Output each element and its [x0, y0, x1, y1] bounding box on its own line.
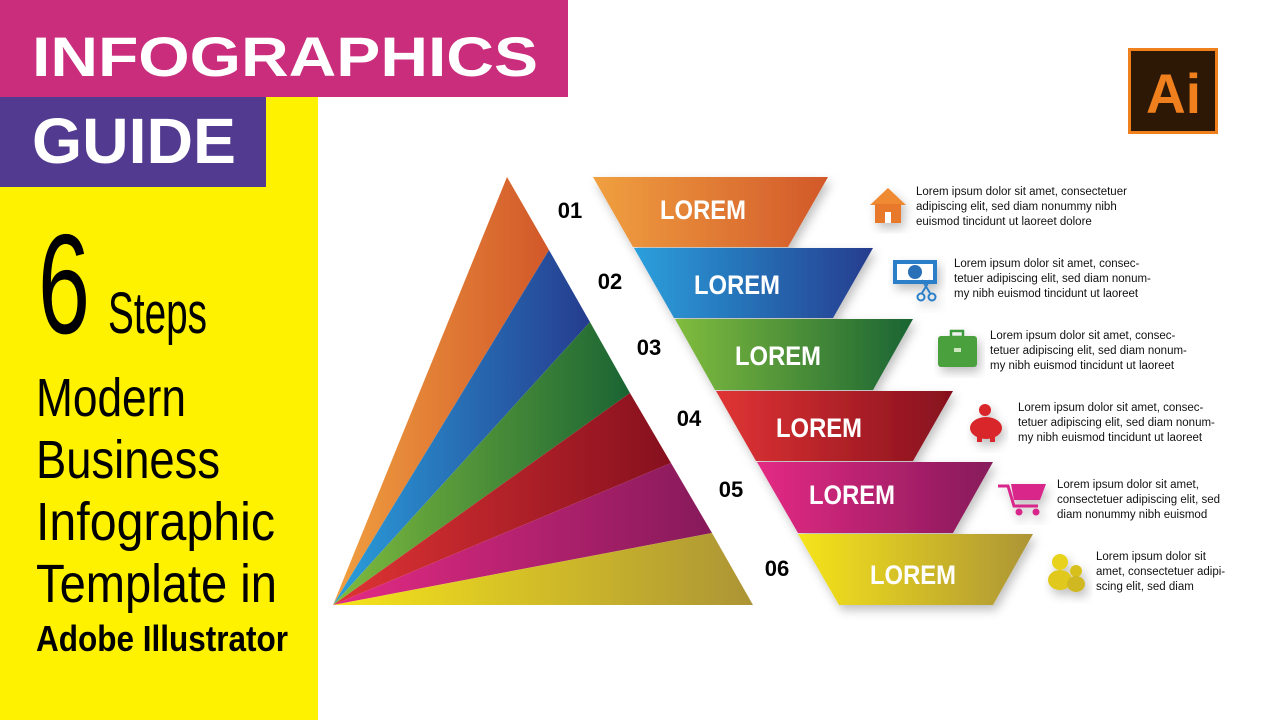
step labels: LOREM: [735, 341, 821, 371]
text: step 4: Lorem ipsum dolor sit amet, consec-: [1018, 402, 1204, 414]
text: step 2: tetuer adipiscing elit, sed diam nonum-: [954, 273, 1151, 285]
icon: house: [870, 188, 906, 223]
subtitle: description: Infographic: [36, 492, 275, 552]
pyramid fan: [333, 177, 753, 605]
step numbers: [558, 198, 789, 581]
subtitle: description: Business: [36, 430, 220, 490]
text: step 3: tetuer adipiscing elit, sed diam nonum-: [990, 345, 1187, 357]
text: step 2: Lorem ipsum dolor sit amet, consec-: [954, 258, 1140, 270]
icon: adobe illustrator logo: Ai: [1146, 62, 1201, 125]
text: step 5: consectetuer adipiscing elit, sed: [1057, 494, 1220, 506]
text: step 3: my nibh euismod tincidunt ut laoreet: [990, 360, 1175, 372]
step numbers: 01: [558, 198, 582, 223]
text: step 6: scing elit, sed diam: [1096, 581, 1194, 593]
step labels: LOREM: [776, 413, 862, 443]
step labels: LOREM: [660, 195, 746, 225]
step labels: LOREM: [870, 560, 956, 590]
text: step 6: Lorem ipsum dolor sit: [1096, 551, 1207, 563]
subtitle: description: Template in: [36, 554, 277, 614]
text: step 4: [1018, 402, 1215, 444]
text: step 5: diam nonummy nibh euismod: [1057, 509, 1207, 521]
text: step 4: tetuer adipiscing elit, sed diam nonum-: [1018, 417, 1215, 429]
step numbers: 06: [765, 556, 789, 581]
step numbers: 05: [719, 477, 743, 502]
text: step 5: [1057, 479, 1220, 521]
header: guide: GUIDE: [32, 105, 236, 177]
subtitle: description: Modern: [36, 368, 186, 428]
text: step 3: [990, 330, 1187, 372]
subtitle: description: Adobe Illustrator: [36, 618, 288, 659]
icon: people: [1048, 554, 1085, 592]
text: step 1: Lorem ipsum dolor sit amet, consectetuer: [916, 186, 1127, 198]
subtitle: 6 steps: 6: [38, 205, 90, 364]
header: infographics: INFOGRAPHICS: [32, 25, 538, 88]
text: step 1: [916, 186, 1127, 228]
yellow side panel: [0, 97, 318, 720]
icon: piggy bank: [970, 404, 1002, 442]
step bars: [593, 177, 1033, 605]
header: guide: [0, 97, 266, 187]
text: step 4: my nibh euismod tincidunt ut laoreet: [1018, 432, 1203, 444]
text: step 6: [1096, 551, 1225, 593]
step labels: LOREM: [809, 480, 895, 510]
step numbers: 03: [637, 335, 661, 360]
text: step 5: Lorem ipsum dolor sit amet,: [1057, 479, 1199, 491]
icon: adobe illustrator logo: [1130, 50, 1216, 132]
icon: briefcase: [938, 331, 977, 367]
text: step 1: euismod tincidunt ut laoreet dolore: [916, 216, 1092, 228]
icon: money cut: [893, 260, 937, 300]
text: step 1: adipiscing elit, sed diam nonummy nibh: [916, 201, 1117, 213]
text: step 3: Lorem ipsum dolor sit amet, consec-: [990, 330, 1176, 342]
subtitle: 6 steps: [38, 205, 207, 364]
step numbers: 04: [677, 406, 702, 431]
subtitle: description: [36, 368, 288, 659]
subtitle: 6 steps: Steps: [108, 281, 207, 346]
icon: shopping cart: [998, 484, 1046, 516]
header: infographics: [0, 0, 568, 97]
step labels: [660, 195, 956, 590]
text: step 2: my nibh euismod tincidunt ut laoreet: [954, 288, 1139, 300]
step labels: LOREM: [694, 270, 780, 300]
text: step 6: amet, consectetuer adipi-: [1096, 566, 1225, 578]
step numbers: 02: [598, 269, 622, 294]
text blocks: [916, 186, 1225, 593]
text: step 2: [954, 258, 1151, 300]
